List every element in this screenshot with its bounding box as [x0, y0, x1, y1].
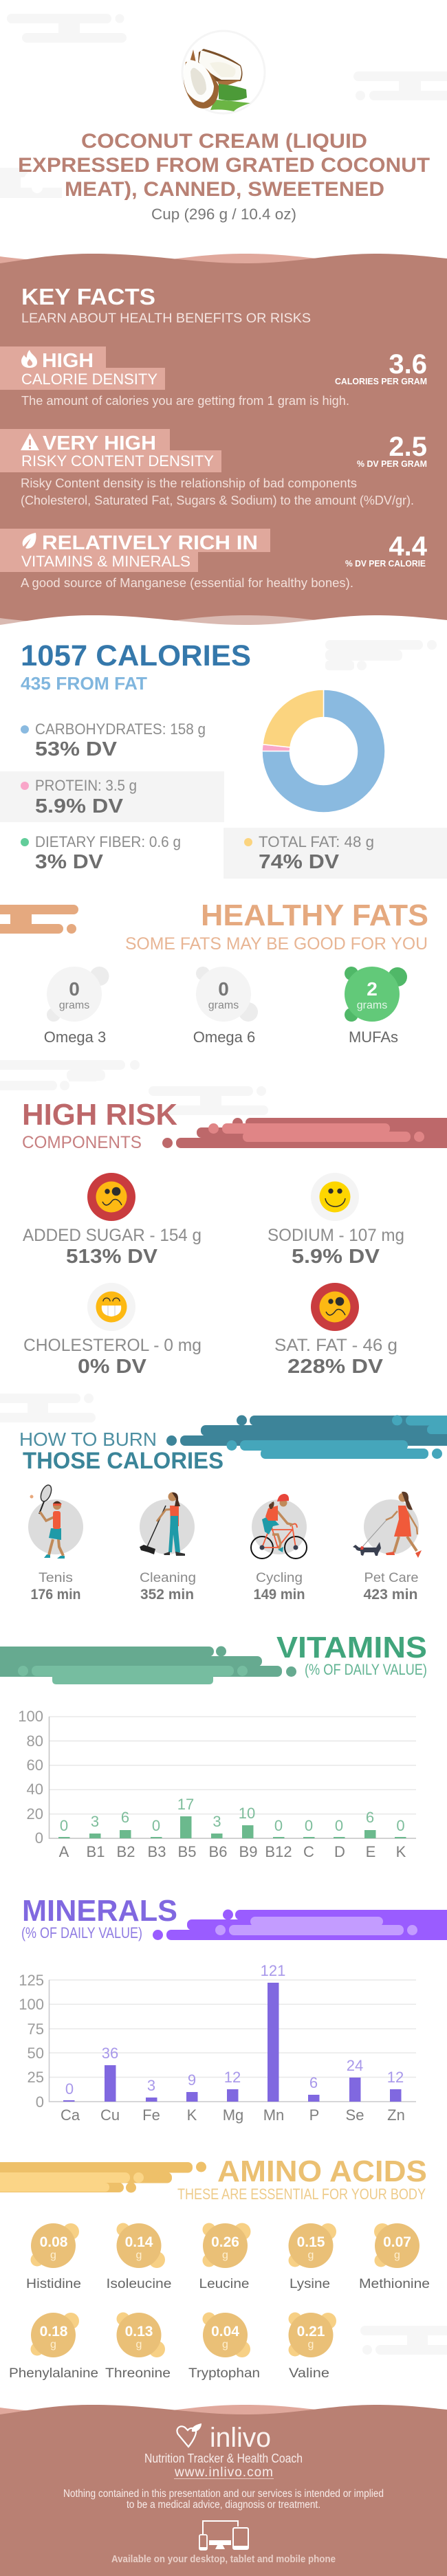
category labels: B6: [209, 1843, 227, 1860]
decoration: amino bars: [0, 2161, 206, 2193]
availability note: Available on your desktop, tablet and mobile phone: [111, 2553, 336, 2565]
category labels: [59, 1843, 406, 1860]
panel: amino acids: [0, 2155, 430, 2381]
amino: leucine: [199, 2223, 250, 2291]
panel: minerals: [19, 1894, 447, 2124]
value labels: 3: [212, 1813, 221, 1830]
fact: vitamins and minerals: % DV PER CALORIE: [345, 558, 426, 569]
panel: footer: [0, 2405, 447, 2576]
high risk heading: HIGH RISK: [22, 1098, 177, 1132]
value labels: 10: [239, 1805, 255, 1822]
logo: inlivo: inlivo: [210, 2423, 271, 2453]
y axis labels: 80: [27, 1732, 43, 1750]
y axis labels: [19, 1972, 44, 2111]
cholesterol: [23, 1283, 201, 1378]
row backgrounds: [0, 771, 447, 879]
fact: calorie density: [0, 346, 427, 408]
fact: vitamins and minerals: VITAMINS & MINERALS: [21, 553, 190, 570]
amino: valine: Valine: [289, 2366, 329, 2381]
tagline: Nutrition Tracker & Health Coach: [144, 2452, 303, 2465]
value labels: 17: [177, 1796, 194, 1813]
saturated fat: [274, 1283, 397, 1378]
category labels: Mn: [263, 2106, 284, 2124]
added sugar: ADDED SUGAR - 154 g: [23, 1226, 201, 1245]
website link: www.inlivo.com: [174, 2465, 273, 2480]
burn heading: [19, 1429, 224, 1474]
amino: methionine: [359, 2223, 430, 2291]
value labels: 0: [60, 1817, 68, 1834]
carbohydrates: 53% DV: [35, 738, 118, 760]
sodium: 5.9% DV: [292, 1246, 380, 1268]
category labels: Fe: [142, 2106, 160, 2124]
amino: histidine: 0.08: [40, 2234, 68, 2250]
dietary fiber: [21, 833, 181, 873]
amino: valine: g: [308, 2339, 314, 2351]
category labels: D: [334, 1843, 345, 1860]
panel: healthy fats: [0, 899, 428, 1046]
omega 3: grams: [59, 1000, 89, 1011]
activity: pet care: [353, 1492, 422, 1558]
calories heading: 1057 CALORIES: [21, 639, 251, 672]
y axis labels: 60: [27, 1757, 43, 1774]
activity labels: Pet Care: [364, 1571, 418, 1585]
category labels: Mg: [223, 2106, 243, 2124]
amino: leucine: 0.26: [211, 2234, 239, 2250]
activity labels: 423 min: [363, 1587, 418, 1603]
added sugar: [23, 1173, 201, 1268]
category labels: Cu: [100, 2106, 120, 2124]
value labels: [60, 1796, 405, 1834]
y axis labels: 0: [35, 1829, 43, 1847]
panel: calories: [0, 639, 447, 879]
title: MEAT), CANNED, SWEETENED: [65, 178, 384, 201]
value labels: 6: [309, 2074, 318, 2091]
amino: tryptophan: [188, 2313, 260, 2381]
total fat: TOTAL FAT: 48 g: [259, 833, 374, 850]
amino: phenylalanine: g: [50, 2339, 56, 2351]
title: COCONUT CREAM (LIQUID: [81, 130, 367, 153]
protein: PROTEIN: 3.5 g: [35, 777, 137, 794]
y axis labels: [18, 1708, 43, 1847]
fact: risky content density: (Cholesterol, Saturated Fat, Sugars & Sodium) to the amount (%DV/gr).: [21, 494, 414, 507]
healthy fats heading: HEALTHY FATS: [201, 899, 428, 932]
fact: risky content density: RISKY CONTENT DENSITY: [21, 452, 214, 470]
value labels: 3: [147, 2077, 155, 2094]
dietary fiber: 3% DV: [35, 851, 104, 873]
omega 6: Omega 6: [193, 1028, 255, 1046]
amino: threonine: 0.13: [125, 2324, 153, 2340]
fact: calorie density: 3.6: [389, 349, 427, 379]
activity labels: 149 min: [253, 1587, 305, 1603]
disclaimer: [63, 2488, 384, 2511]
fact: vitamins and minerals: A good source of Manganese (essential for healthy bones).: [21, 576, 353, 590]
calories heading: [21, 639, 251, 694]
amino: phenylalanine: Phenylalanine: [9, 2366, 98, 2381]
saturated fat: SAT. FAT - 46 g: [274, 1336, 397, 1355]
category labels: K: [187, 2106, 197, 2124]
high risk heading: [22, 1098, 177, 1152]
category labels: B12: [265, 1843, 292, 1860]
vitamins heading: [276, 1631, 427, 1678]
category labels: Ca: [61, 2106, 80, 2124]
amino: histidine: [26, 2223, 81, 2291]
category labels: E: [366, 1843, 375, 1860]
activity labels: Tenis: [39, 1571, 73, 1585]
value labels: 0: [65, 2080, 74, 2098]
fact: vitamins and minerals: 4.4: [389, 531, 428, 562]
fact: risky content density: VERY HIGH: [43, 432, 156, 454]
category labels: B2: [117, 1843, 135, 1860]
bars: [58, 1816, 406, 1838]
cholesterol: 0% DV: [78, 1356, 147, 1378]
amino acids heading: [177, 2155, 427, 2203]
MUFAs: grams: [357, 1000, 387, 1011]
value labels: 3: [91, 1813, 99, 1830]
MUFAs: [345, 967, 407, 1046]
icon: flame: [21, 350, 37, 368]
amino: isoleucine: 0.14: [125, 2234, 153, 2250]
key facts heading: KEY FACTS: [21, 284, 155, 309]
amino: valine: 0.21: [297, 2324, 325, 2340]
amino: leucine: Leucine: [199, 2277, 249, 2291]
disclaimer: Nothing contained in this presentation and our services is intended or implied: [63, 2488, 384, 2500]
carbohydrates: CARBOHYDRATES: 158 g: [35, 720, 206, 738]
fact: risky content density: Risky Content density is the relationship of bad components: [21, 476, 357, 490]
high risk heading: COMPONENTS: [22, 1133, 142, 1152]
protein: 5.9% DV: [35, 795, 124, 817]
category labels: B3: [148, 1843, 166, 1860]
value labels: 121: [261, 1962, 285, 1979]
y axis labels: 25: [28, 2069, 44, 2086]
amino: methionine: g: [394, 2249, 400, 2261]
amino: lysine: g: [308, 2249, 314, 2261]
activity labels: [30, 1571, 418, 1603]
value labels: 36: [102, 2045, 118, 2062]
amino acids heading: AMINO ACIDS: [217, 2155, 427, 2188]
activity labels: Cycling: [256, 1571, 303, 1585]
y axis labels: 125: [19, 1972, 44, 1989]
minerals heading: (% OF DAILY VALUE): [21, 1924, 142, 1941]
total fat: [244, 833, 374, 873]
sodium: SODIUM - 107 mg: [268, 1226, 404, 1245]
fact: vitamins and minerals: [0, 529, 428, 590]
omega 3: Omega 3: [44, 1028, 106, 1046]
panel: key facts: [0, 254, 447, 639]
title: [18, 130, 430, 201]
category labels: K: [396, 1843, 406, 1860]
fact: risky content density: % DV PER GRAM: [357, 459, 427, 469]
y axis labels: 20: [27, 1805, 43, 1823]
title: EXPRESSED FROM GRATED COCONUT: [18, 154, 430, 177]
MUFAs: MUFAs: [349, 1028, 398, 1046]
healthy fats heading: [125, 899, 428, 954]
omega 6: 0: [218, 978, 229, 1000]
amino: tryptophan: 0.04: [211, 2324, 239, 2340]
fact: calorie density: The amount of calories you are getting from 1 gram is high.: [21, 394, 349, 408]
omega 3: 0: [69, 978, 80, 1000]
category labels: Se: [346, 2106, 364, 2124]
burn heading: HOW TO BURN: [19, 1429, 157, 1450]
vitamins bar chart: [18, 1708, 416, 1860]
amino: threonine: g: [136, 2339, 142, 2351]
amino: lysine: Lysine: [290, 2277, 330, 2291]
y axis labels: 50: [28, 2045, 44, 2062]
minerals heading: MINERALS: [22, 1894, 177, 1928]
key facts heading: [21, 284, 311, 326]
serving size: Cup (296 g / 10.4 oz): [151, 206, 296, 223]
activity: cleaning: [140, 1492, 195, 1556]
key facts heading: LEARN ABOUT HEALTH BENEFITS OR RISKS: [21, 311, 311, 326]
amino: tryptophan: g: [222, 2339, 228, 2351]
omega 6: [193, 967, 258, 1046]
total fat: 74% DV: [259, 851, 340, 873]
saturated fat: 228% DV: [287, 1356, 384, 1378]
minerals bar chart: [19, 1962, 416, 2124]
value labels: 0: [396, 1817, 405, 1834]
amino: phenylalanine: 0.18: [40, 2324, 68, 2340]
activity labels: 352 min: [140, 1587, 194, 1603]
icon: devices: [199, 2521, 248, 2550]
MUFAs: 2: [367, 978, 378, 1000]
activity: tennis: [28, 1484, 83, 1559]
category labels: B9: [239, 1843, 257, 1860]
logo: inlivo: [177, 2423, 271, 2453]
y axis labels: 100: [18, 1708, 43, 1725]
value labels: 12: [224, 2069, 241, 2086]
donut chart: [262, 690, 385, 813]
y axis labels: 40: [27, 1781, 43, 1798]
icon: leaf: [23, 533, 36, 549]
cholesterol: CHOLESTEROL - 0 mg: [23, 1336, 201, 1355]
amino: lysine: [289, 2223, 336, 2291]
omega 3: [44, 967, 109, 1046]
added sugar: 513% DV: [66, 1246, 158, 1268]
icon: warning triangle: [21, 433, 39, 450]
disclaimer: to be a medical advice, diagnosis or treatment.: [127, 2499, 320, 2511]
carbohydrates: [21, 720, 206, 760]
fact: calorie density: HIGH: [42, 350, 94, 372]
bars: [63, 1983, 402, 2102]
value labels: 9: [188, 2071, 196, 2089]
amino: histidine: g: [50, 2249, 56, 2261]
decoration: burn bars: [166, 1415, 447, 1459]
vitamins heading: VITAMINS: [276, 1631, 427, 1664]
category labels: A: [59, 1843, 69, 1860]
category labels: B5: [178, 1843, 196, 1860]
panel: how to burn: [19, 1415, 447, 1603]
calories heading: 435 FROM FAT: [21, 673, 147, 694]
healthy fats heading: SOME FATS MAY BE GOOD FOR YOU: [125, 934, 428, 954]
icon: coconut in circle: [182, 31, 265, 113]
activity: cycling: [251, 1494, 307, 1559]
minerals heading: [21, 1894, 177, 1941]
activity labels: Cleaning: [140, 1571, 196, 1585]
panel: high risk: [22, 1098, 447, 1378]
decoration: high risk bars: [162, 1118, 447, 1148]
sodium: [268, 1173, 404, 1268]
amino: methionine: Methionine: [359, 2277, 430, 2291]
amino: valine: [289, 2313, 336, 2381]
amino: methionine: 0.07: [383, 2234, 411, 2250]
y axis labels: 0: [36, 2093, 44, 2111]
category labels: Zn: [387, 2106, 405, 2124]
amino: histidine: Histidine: [26, 2277, 81, 2291]
value labels: [65, 1962, 404, 2098]
fact: risky content density: [0, 429, 427, 507]
fact: calorie density: CALORIES PER GRAM: [335, 376, 427, 386]
fact: calorie density: CALORIE DENSITY: [21, 371, 157, 388]
value labels: 0: [152, 1817, 160, 1834]
fact: vitamins and minerals: RELATIVELY RICH IN: [42, 532, 258, 554]
dietary fiber: DIETARY FIBER: 0.6 g: [35, 833, 181, 850]
fact: risky content density: 2.5: [389, 432, 427, 462]
burn heading: THOSE CALORIES: [23, 1448, 224, 1474]
y axis labels: 75: [28, 2021, 44, 2038]
amino: isoleucine: g: [136, 2249, 142, 2261]
activity labels: 176 min: [30, 1587, 81, 1603]
value labels: 0: [305, 1817, 313, 1834]
category labels: C: [303, 1843, 314, 1860]
value labels: 6: [121, 1809, 129, 1826]
y axis labels: 100: [19, 1996, 44, 2013]
value labels: 0: [274, 1817, 283, 1834]
decoration: minerals bars: [153, 1910, 447, 1940]
value labels: 6: [366, 1809, 374, 1826]
decoration: healthy fats bars: [0, 905, 78, 934]
amino: isoleucine: Isoleucine: [106, 2277, 172, 2291]
omega 6: grams: [208, 1000, 239, 1011]
amino: tryptophan: Tryptophan: [188, 2366, 260, 2381]
category labels: P: [309, 2106, 319, 2124]
category labels: B1: [87, 1843, 105, 1860]
value labels: 12: [387, 2069, 404, 2086]
amino: threonine: [105, 2313, 171, 2381]
amino: leucine: g: [222, 2249, 228, 2261]
amino: lysine: 0.15: [297, 2234, 325, 2250]
value labels: 0: [335, 1817, 343, 1834]
panel: vitamins: [0, 1631, 427, 1860]
protein: [21, 777, 137, 817]
amino: isoleucine: [106, 2223, 172, 2291]
amino: threonine: Threonine: [105, 2366, 171, 2381]
category labels: [61, 2106, 405, 2124]
decoration: vitamins bars: [0, 1646, 296, 1684]
value labels: 24: [347, 2057, 363, 2074]
amino: phenylalanine: [9, 2313, 98, 2381]
